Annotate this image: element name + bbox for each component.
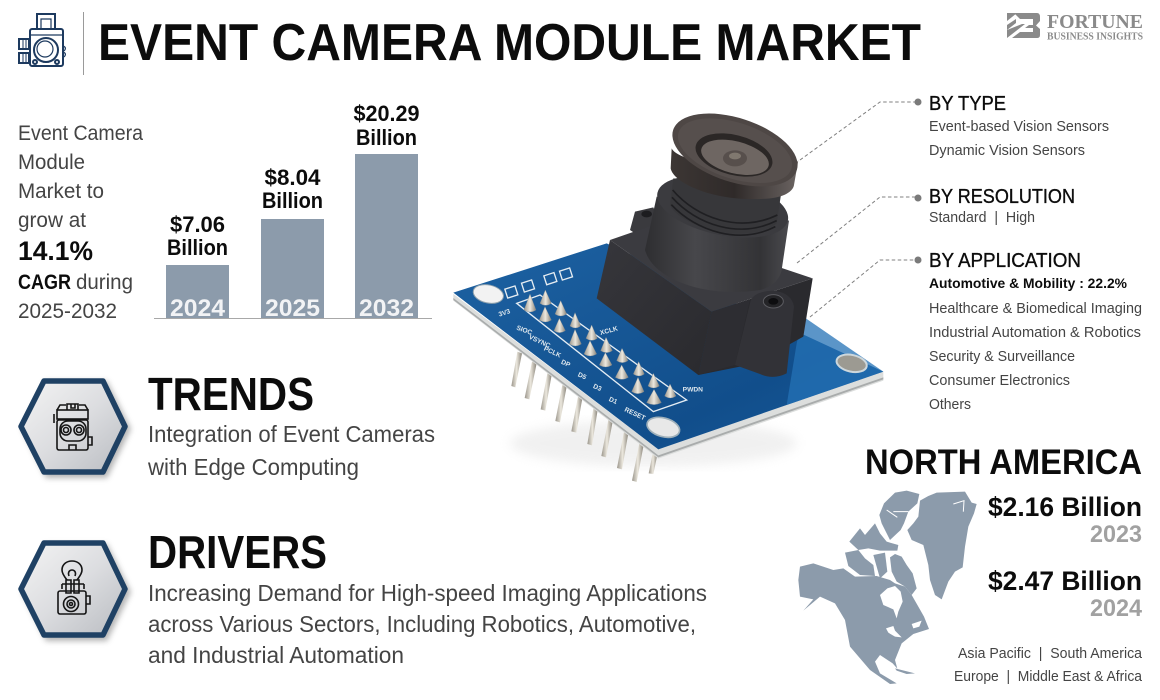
- segment: by type: Dynamic Vision Sensors: [929, 142, 1085, 159]
- text block: other regions: Asia Pacific | South America: [958, 645, 1143, 662]
- heading: north america: NORTH AMERICA: [865, 443, 1142, 482]
- text block: CAGR statement: Module: [18, 151, 85, 174]
- text block: drivers description: [148, 580, 707, 668]
- text block: other regions: [954, 645, 1143, 685]
- text block: CAGR statement: 2025-2032: [18, 300, 117, 323]
- heading: drivers: DRIVERS: [148, 526, 327, 578]
- segment: by application: Security & Surveillance: [929, 348, 1075, 365]
- text block: CAGR statement: CAGR: [18, 271, 71, 294]
- segment: by application: Consumer Electronics: [929, 372, 1070, 389]
- segment: by resolution: BY RESOLUTION: [929, 186, 1075, 208]
- lens barrel: [645, 165, 794, 292]
- segment: by application: Industrial Automation & Robotics: [929, 324, 1141, 341]
- segment: by application: Automotive & Mobility : 22.2%: [929, 275, 1128, 291]
- heading: trends: TRENDS: [148, 368, 314, 420]
- bar: 2032: $20.29: [354, 101, 420, 126]
- bar: 2025: 2025: [265, 295, 320, 322]
- segment: by application: Others: [929, 396, 971, 413]
- stat: 2023 value: 2023: [1090, 521, 1142, 548]
- segment: by type: [929, 93, 1109, 159]
- camera module photo: [453, 99, 883, 482]
- module pins: [511, 352, 657, 482]
- stat: 2023 value: [988, 492, 1142, 548]
- circuit board: 3V3: [498, 308, 511, 319]
- circuit board: SIOC: [515, 325, 533, 337]
- text block: trends description: with Edge Computing: [147, 454, 359, 480]
- text block: drivers description: across Various Sectors, Including Robotics, Automotive,: [148, 611, 696, 637]
- stat: 2024 value: 2024: [1090, 595, 1143, 622]
- text block: trends description: [147, 421, 435, 480]
- circuit board: VSYNC: [527, 334, 551, 350]
- map: north america: [798, 491, 977, 684]
- segment: by type: BY TYPE: [929, 93, 1006, 115]
- icon: header camera: [19, 14, 65, 66]
- bar chart: market size: [154, 101, 432, 322]
- bar: 2024: $7.06: [170, 212, 225, 237]
- bar: 2032: 2032: [359, 295, 414, 322]
- logo: Fortune Business Insights: [1007, 11, 1143, 42]
- circuit board: D3: [592, 383, 603, 393]
- segment: by application: Healthcare & Biomedical Imaging: [929, 300, 1142, 317]
- segment: by application: BY APPLICATION: [929, 250, 1081, 272]
- logo: Fortune Business Insights: FORTUNE: [1047, 11, 1143, 33]
- bar: 2024: Billion: [167, 235, 228, 260]
- segment: by resolution: Standard | High: [929, 209, 1035, 226]
- circuit board: PCLK: [542, 345, 562, 360]
- text block: drivers description: and Industrial Automation: [148, 642, 404, 668]
- text block: CAGR statement: 14.1%: [18, 236, 93, 266]
- bar: 2025: $8.04: [264, 165, 321, 190]
- connector: by type: [800, 98, 922, 160]
- text block: CAGR statement: Market to: [18, 180, 104, 203]
- segment: by resolution: [929, 186, 1075, 226]
- bar: 2025: [261, 165, 324, 322]
- sensor housing: [597, 207, 813, 377]
- logo: Fortune Business Insights: BUSINESS INSIGHTS: [1047, 32, 1143, 42]
- title: EVENT CAMERA MODULE MARKET: [98, 14, 921, 72]
- circuit board: DP: [560, 359, 572, 369]
- connector: by resolution: [797, 194, 922, 263]
- text block: CAGR statement: Event Camera: [18, 122, 143, 145]
- text block: CAGR statement: grow at: [18, 209, 86, 232]
- text block: drivers description: Increasing Demand for High-speed Imaging Applications: [148, 580, 707, 606]
- bar: 2032: Billion: [356, 125, 417, 150]
- text block: trends description: Integration of Event Cameras: [148, 421, 435, 447]
- lens ring: [663, 99, 807, 201]
- connector: by application: [810, 256, 922, 317]
- stat: 2024 value: $2.47 Billion: [988, 566, 1142, 596]
- circuit board: D5: [576, 371, 587, 382]
- stat: 2023 value: $2.16 Billion: [988, 492, 1142, 522]
- circuit board: [453, 243, 883, 459]
- bar: 2024: 2024: [170, 295, 226, 322]
- icon: trends hexagon: [21, 381, 131, 478]
- circuit board: XCLK: [599, 325, 619, 337]
- circuit board: D1: [607, 396, 618, 406]
- text block: CAGR statement: during: [76, 271, 133, 294]
- bar: 2025: Billion: [262, 188, 323, 213]
- segment: by application: [929, 250, 1142, 413]
- segment: by type: Event-based Vision Sensors: [929, 118, 1109, 135]
- bar: 2032: [354, 101, 420, 322]
- circuit board: RESET: [623, 406, 646, 422]
- bar: 2024: [166, 212, 229, 322]
- text block: other regions: Europe | Middle East & Africa: [954, 668, 1143, 685]
- header pins: [524, 290, 676, 405]
- stat: 2024 value: [988, 566, 1143, 622]
- text block: CAGR statement: [18, 122, 143, 323]
- icon: drivers hexagon: [21, 543, 131, 641]
- circuit board: PWDN: [683, 387, 703, 394]
